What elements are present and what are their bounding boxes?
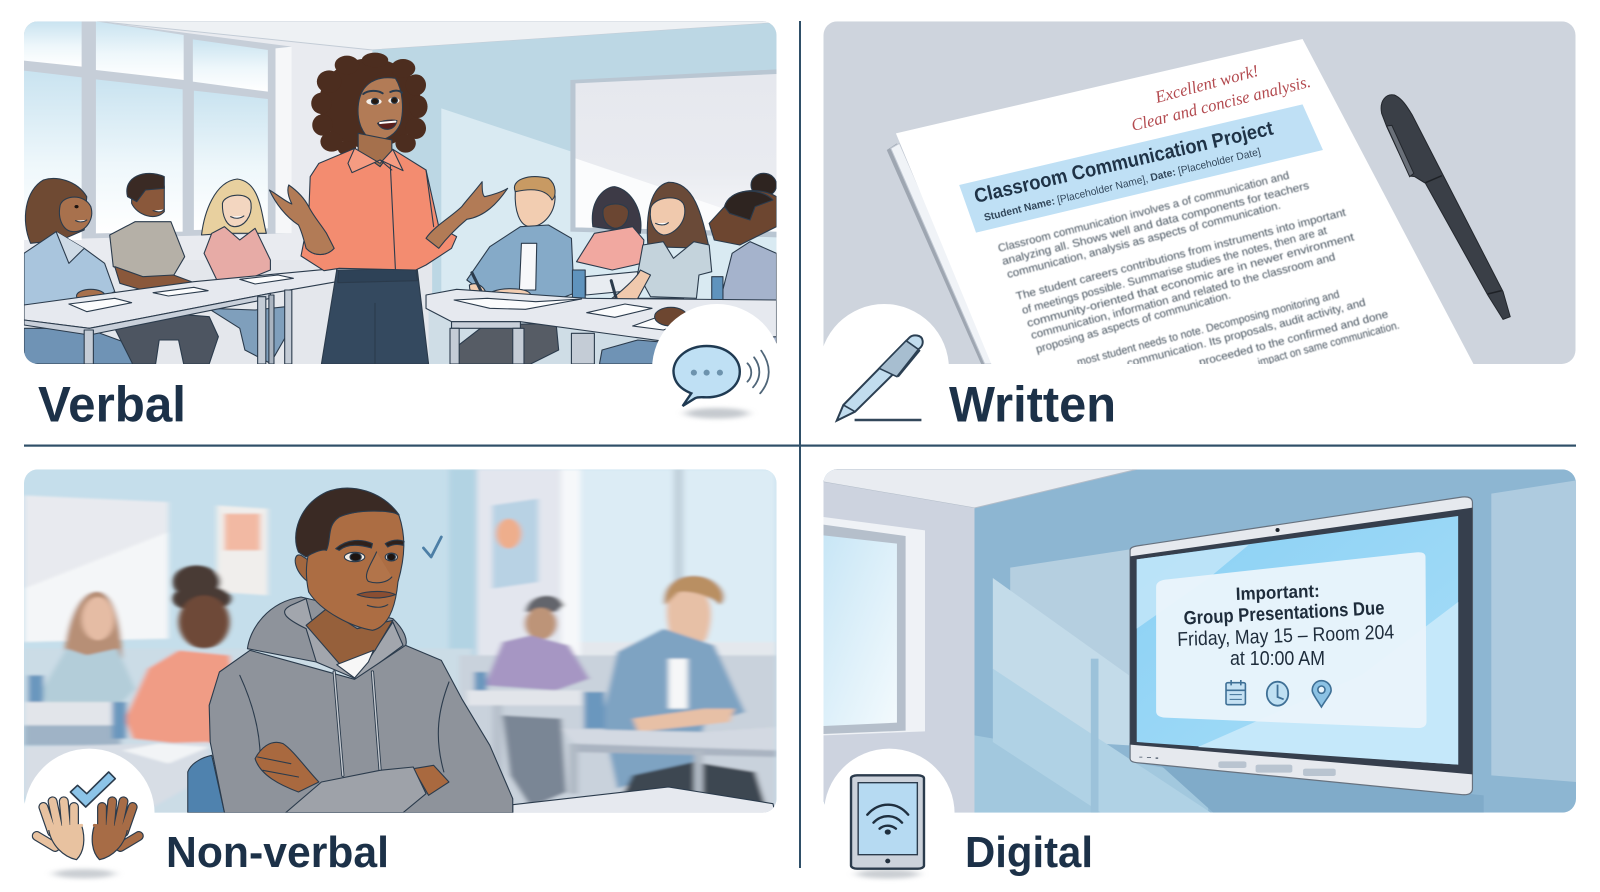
student in grey hoodie: [209, 488, 513, 813]
display announcement text: Important:: [1235, 581, 1320, 604]
whiteboard: [570, 69, 777, 237]
document body text: analyzing all. Shows well and data components for teachers: [1001, 180, 1311, 268]
icon: pen writing on line: [837, 335, 923, 421]
icon: tablet with wifi: [851, 775, 924, 879]
icon: raised hands with check: [37, 772, 139, 878]
paper text: [972, 61, 1401, 370]
icon: calendar: [1226, 680, 1245, 705]
foreground desk: [513, 787, 776, 815]
icon: clock: [1267, 682, 1288, 706]
icon badge: white circle: [824, 749, 955, 879]
student: hair bun: [709, 173, 777, 364]
pen: [1381, 95, 1510, 319]
right hand: [92, 801, 139, 860]
student: blonde: [202, 179, 286, 363]
heading: Verbal: Verbal: [38, 376, 186, 432]
horizontal divider: [24, 444, 1576, 447]
display announcement text: [1177, 581, 1395, 670]
document body text: communication, analysis as aspects of communication.: [1006, 200, 1282, 281]
icon: map pin: [1312, 681, 1331, 707]
document body text: Classroom communication involves a of communication and: [997, 170, 1291, 255]
panel: verbal communication: [24, 21, 782, 434]
desks left: [24, 268, 337, 364]
document title: Classroom Communication Project: [972, 118, 1276, 208]
document body text: impact on same communication.: [1257, 320, 1401, 369]
blurred classroom background: [24, 469, 777, 815]
blurred students: [64, 591, 122, 669]
teacher: [269, 53, 508, 364]
document body text: The student careers contributions from instruments into important: [1015, 207, 1347, 303]
window panes: [24, 21, 292, 240]
student: blue sweater: [24, 179, 133, 364]
left hand: [37, 801, 84, 860]
document body text: communication, information and related to the classroom and: [1030, 251, 1337, 342]
panel: non-verbal communication: [24, 469, 777, 879]
student: grey top long hair: [607, 182, 712, 308]
illustration: graded paper on desk: [823, 21, 1576, 364]
icon badge: white circle: [819, 304, 949, 434]
heading: Non-verbal: Non-verbal: [166, 828, 389, 877]
document body text: proceeded to the confirmed and done: [1198, 308, 1390, 369]
display announcement text: Group Presentations Due: [1183, 598, 1385, 629]
heading: Written: Written: [949, 376, 1116, 432]
smart display: [1130, 497, 1472, 795]
illustration: teacher speaking to class: [24, 21, 777, 367]
vertical divider: [799, 21, 801, 868]
display announcement text: at 10:00 AM: [1230, 648, 1325, 670]
desks right: [426, 289, 777, 364]
icon badge: white circle: [24, 749, 155, 879]
icon: speech bubble with sound waves: [673, 346, 769, 419]
announcement card: [1156, 552, 1427, 728]
document body text: [997, 170, 1401, 370]
handwritten teacher note: Clear and concise analysis.: [1129, 72, 1313, 135]
student: grey tee: [110, 173, 218, 364]
window: [823, 517, 925, 735]
document body text: proposing as aspects of communication.: [1035, 289, 1232, 356]
small check mark: [423, 537, 441, 557]
crossed arms: [255, 742, 319, 792]
display announcement text: Friday, May 15 – Room 204: [1177, 621, 1395, 651]
panel: digital communication: [823, 469, 1577, 879]
icon badge: white circle: [652, 304, 782, 434]
document body text: community-oriented that economic are in newer environment: [1026, 231, 1355, 330]
title band: [959, 104, 1323, 233]
document body text: most student needs to note. Decomposing monitoring and: [1076, 289, 1341, 369]
document body text: communication. Its proposals, audit activity, and: [1126, 297, 1367, 370]
chair: [188, 755, 224, 813]
document subtitle: Student Name: [Placeholder Name], Date: [Placeholder Date]: [983, 146, 1262, 224]
heading: Digital: Digital: [965, 828, 1093, 877]
student: back row pink: [577, 187, 644, 295]
student: denim shirt: [457, 177, 585, 364]
handwritten teacher note: Excellent work!: [1152, 61, 1260, 107]
document body text: of meetings possible. Summarise studies the notes, then are at: [1021, 225, 1328, 317]
panel: written communication: [819, 21, 1576, 434]
illustration: attentive student with crossed arms: [24, 469, 777, 815]
illustration: classroom smart display: [823, 469, 1577, 813]
